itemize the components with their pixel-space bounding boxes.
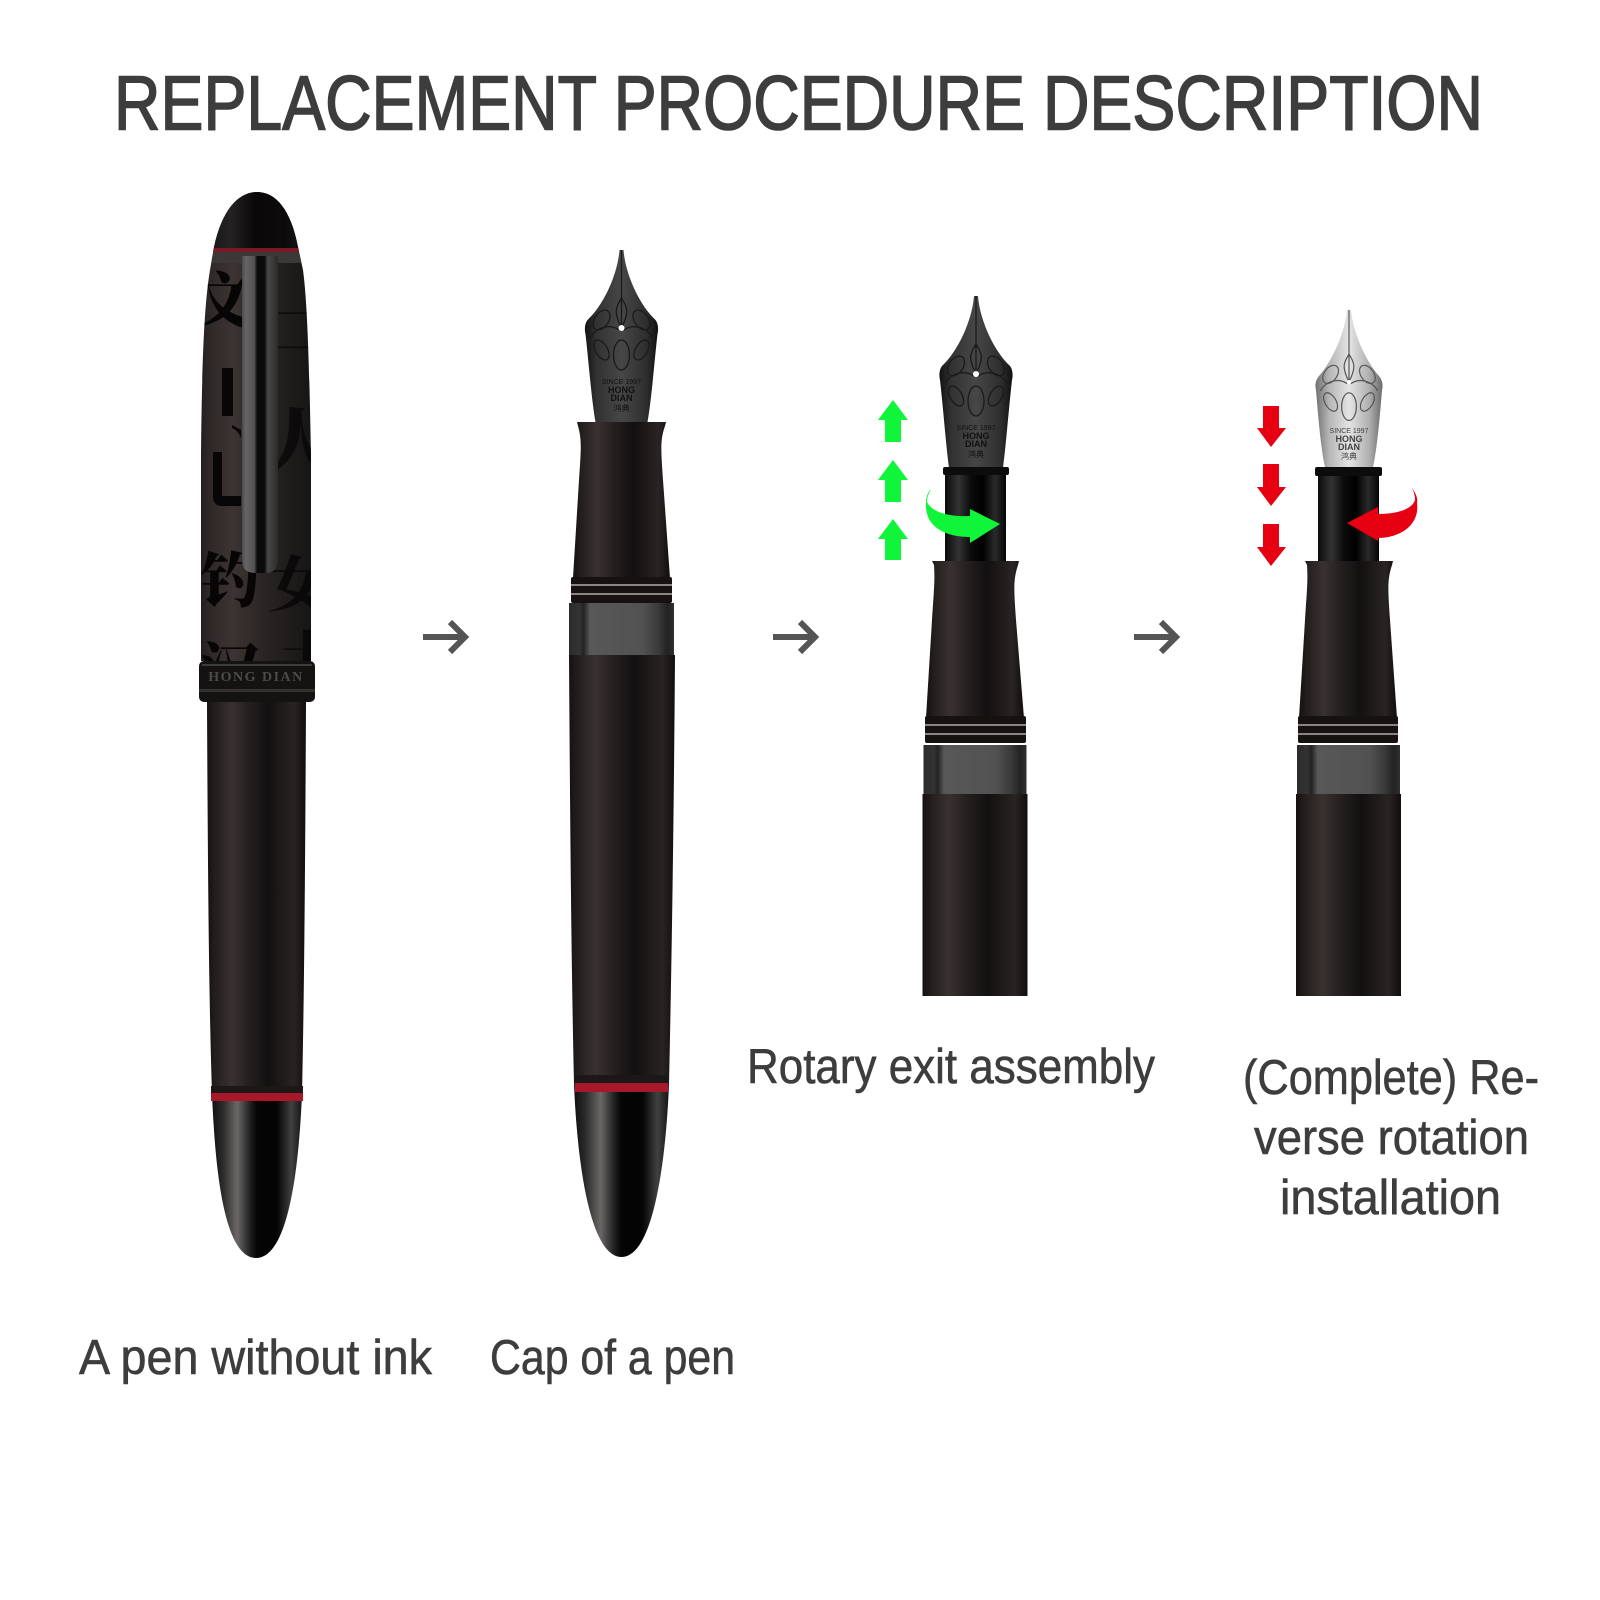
pen 2 barrel [569,655,675,1084]
pen 4 black feed cylinder [1318,472,1379,562]
caption: step 1: A pen without ink [79,1331,432,1385]
pen 2 nib: 鸿典 [614,403,630,413]
pen 4: silver nib unit installed [1296,310,1401,996]
pen 4 grip section [1299,561,1397,718]
pen 2 nib: HONG [608,385,635,395]
pen 1 cap: 钓 [200,534,260,620]
pen 2 rings [571,577,672,603]
pen 1 cap ring with engraved brand [199,661,315,702]
pen 4 nib: SINCE 1997 [1330,428,1369,435]
pen 3 nib: 鸿典 [968,449,984,459]
arrow: step 1 to 2 [423,622,465,652]
caption: step 4: installation [1280,1171,1501,1225]
down arrow 3 [1257,524,1286,566]
pen 1 barrel [207,702,306,1094]
pen 4 nib: HONG [1336,434,1362,444]
red down arrows [1257,406,1286,566]
pen 4 band [1297,745,1400,794]
pen 3 nib [939,296,1013,468]
green up arrows [878,400,908,560]
pen 1 cap: 女 [268,538,332,624]
caption: step 3: Rotary exit assembly [747,1040,1155,1094]
pen 3 rings [925,716,1026,743]
pen 3 collar [943,467,1009,475]
up arrow 1 [878,400,908,442]
pen 4 collar [1315,467,1382,476]
arrow: step 3 to 4 [1134,622,1176,652]
caption: step 2: Cap of a pen [490,1331,735,1385]
pen 1 cap: 十 [282,615,332,687]
pen 2 grip section [573,422,670,578]
pen 4 nib [1315,310,1383,467]
pen 1 cap: 二 [270,284,330,370]
up arrow 2 [878,460,908,502]
caption: step 4 [1243,1051,1539,1225]
pen 3 grip section [926,561,1024,718]
pen 4 rings [1298,716,1398,743]
green rotation arrow [926,489,1000,543]
pen 1 cap ring with engraved brand: HONG DIAN [208,670,304,685]
pen 1 cap [201,192,311,661]
pen 1 cap: 汉 [200,624,260,710]
pen 3 band [924,745,1026,794]
pen 3 black feed cylinder [945,472,1006,562]
caption: step 4: verse rotation [1254,1111,1529,1165]
pen 3 nib: DIAN [965,439,987,449]
up arrow 3 [878,519,908,560]
pen 1 cap: 文 [193,254,253,340]
pen 1: capped pen without ink [199,192,315,1258]
pen 2 nib [585,250,658,422]
pen 4 nib: DIAN [1338,442,1360,452]
down arrow 2 [1257,464,1286,506]
pen 1 cap: 人 [262,385,337,492]
pen 2: pen with cap removed [569,250,675,1257]
pen 1 blind cap with red ring [212,1094,302,1258]
pen 4 nib: 鸿典 [1341,451,1357,461]
pen 2 blind cap with red ring [574,1084,669,1257]
red rotation arrow [1347,488,1417,541]
pen 3 barrel [922,794,1028,996]
pen 2 band [569,603,674,655]
pen 3: nib unit rotated out [922,296,1028,996]
pen 3 nib: HONG [962,431,990,441]
pen 4 barrel [1296,794,1401,996]
caption: step 4: (Complete) Re- [1243,1051,1539,1105]
arrow: step 2 to 3 [773,622,815,652]
pen 2 nib: SINCE 1997 [602,379,641,386]
pen 2 nib: DIAN [610,393,632,403]
pen 3 nib: SINCE 1997 [957,425,996,432]
down arrow 1 [1257,406,1286,447]
